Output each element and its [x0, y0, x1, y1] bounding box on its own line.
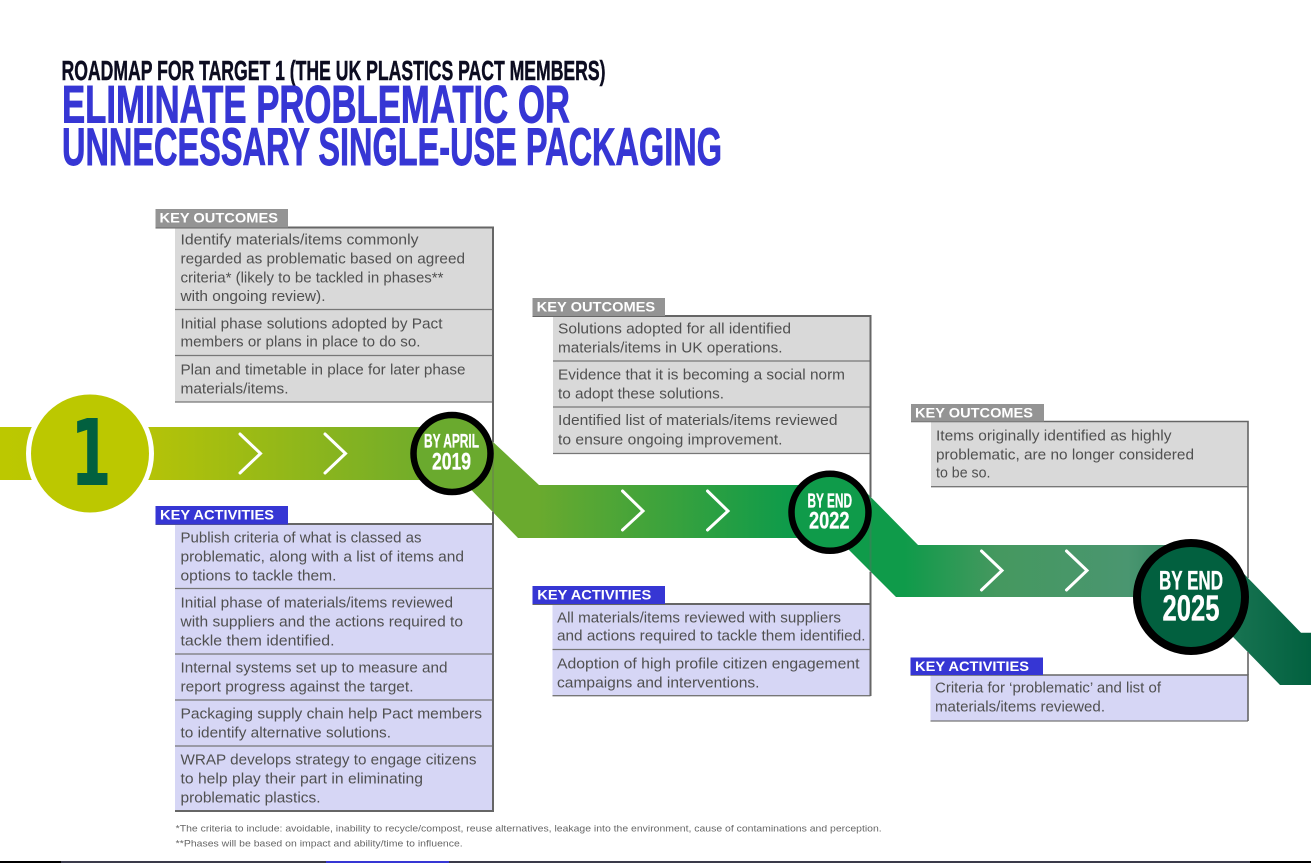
subtitle: ROADMAP FOR TARGET 1 (THE UK PLASTICS PACT MEMBERS) [62, 55, 606, 86]
activities list: report progress against the target. [180, 680, 414, 696]
milestone: by end 2022 [792, 474, 868, 551]
panel: key outcomes by end 2025 [911, 404, 1248, 578]
tag: key outcomes [156, 209, 288, 228]
outcomes list: to ensure ongoing improvement. [558, 432, 782, 448]
activities list [935, 681, 1162, 716]
activities list: problematic, along with a list of items and [180, 550, 464, 566]
outcomes list: problematic, are no longer considered [936, 447, 1194, 463]
milestone: by end 2025: 2025 [1162, 588, 1220, 629]
tag: key activities: KEY ACTIVITIES [537, 587, 651, 602]
target number badge: 1 [70, 400, 112, 507]
activities list: Packaging supply chain help Pact members [180, 706, 482, 722]
outcomes list: to adopt these solutions. [558, 386, 724, 402]
outcomes list: members or plans in place to do so. [180, 335, 420, 351]
tag: key outcomes: KEY OUTCOMES [915, 406, 1033, 420]
activities list: Publish criteria of what is classed as [180, 530, 422, 546]
outcomes list: Identify materials/items commonly [180, 232, 419, 248]
activities list: to identify alternative solutions. [180, 725, 391, 741]
outcomes list: with ongoing review). [179, 289, 326, 305]
activities list [557, 610, 866, 691]
panel: key activities by end 2022 [532, 497, 870, 696]
panel: key outcomes by April 2019 [156, 209, 493, 442]
activities list: campaigns and interventions. [557, 675, 760, 691]
outcomes list: Solutions adopted for all identified [558, 321, 791, 337]
panel: key outcomes by end 2022 [532, 298, 870, 497]
main heading line 2: UNNECESSARY SINGLE-USE PACKAGING [62, 118, 722, 177]
target number badge [26, 390, 154, 518]
tag: key activities: KEY ACTIVITIES [915, 659, 1029, 674]
outcomes list: materials/items in UK operations. [558, 340, 782, 356]
footnotes: *The criteria to include: avoidable, inability to recycle/compost, reuse alternatives, leakage into the environment, cause of contaminations and perception. [176, 824, 882, 835]
outcomes list: criteria* (likely to be tackled in phases** [180, 270, 444, 286]
activities list: and actions required to tackle them identified. [557, 628, 866, 644]
footnotes: **Phases will be based on impact and ability/time to influence. [176, 839, 463, 850]
outcomes list: Items originally identified as highly [936, 428, 1172, 444]
outcomes list: Evidence that it is becoming a social norm [558, 367, 845, 383]
tag: key activities [910, 658, 1043, 675]
main heading line 1: ELIMINATE PROBLEMATIC OR [62, 76, 570, 134]
outcomes list: Initial phase solutions adopted by Pact [180, 316, 442, 332]
activities list: Internal systems set up to measure and [180, 660, 448, 676]
outcomes list: Plan and timetable in place for later phase [180, 362, 466, 378]
activities list: with suppliers and the actions required to [179, 614, 463, 630]
milestone: by end 2025 [1137, 543, 1245, 651]
timeline ribbon [0, 427, 1311, 685]
activities list: materials/items reviewed. [935, 700, 1105, 716]
panel: key activities by end 2025 [910, 652, 1248, 721]
title block [62, 55, 722, 177]
activities list [179, 530, 482, 806]
activities list: tackle them identified. [180, 634, 334, 650]
milestone: by end 2022: BY END [808, 490, 852, 512]
tag: key activities: KEY ACTIVITIES [160, 508, 274, 522]
panel: key activities by April 2019 [156, 442, 493, 811]
activities list: Initial phase of materials/items reviewed [180, 595, 453, 611]
outcomes list: materials/items. [180, 381, 288, 397]
outcomes list [936, 428, 1194, 482]
tag: key outcomes: KEY OUTCOMES [537, 299, 655, 314]
activities list: options to tackle them. [180, 569, 336, 585]
activities list: All materials/items reviewed with suppliers [557, 610, 841, 626]
tag: key outcomes [532, 298, 665, 316]
outcomes list: regarded as problematic based on agreed [180, 251, 465, 267]
milestone: by April 2019: 2019 [432, 448, 471, 475]
activities list: Adoption of high profile citizen engagement [557, 656, 860, 672]
outcomes list [558, 321, 845, 448]
activities list: WRAP develops strategy to engage citizens [180, 752, 476, 768]
activities list: to help play their part in eliminating [180, 771, 423, 787]
milestone: by April 2019: BY APRIL [424, 431, 479, 452]
tag: key activities [156, 506, 288, 524]
chevrons along the ribbon [240, 434, 1087, 590]
footnotes [176, 824, 882, 850]
outcomes list [179, 232, 465, 397]
activities list: problematic plastics. [180, 790, 320, 806]
milestone: by April 2019 [414, 415, 490, 492]
outcomes list: Identified list of materials/items reviewed [558, 413, 838, 429]
milestone: by end 2022: 2022 [809, 507, 850, 534]
outcomes list: to be so. [936, 466, 990, 482]
tag: key activities [532, 586, 665, 604]
tag: key outcomes: KEY OUTCOMES [160, 210, 278, 226]
milestone: by end 2025: BY END [1159, 565, 1223, 595]
activities list: Criteria for ‘problematic’ and list of [935, 681, 1162, 697]
